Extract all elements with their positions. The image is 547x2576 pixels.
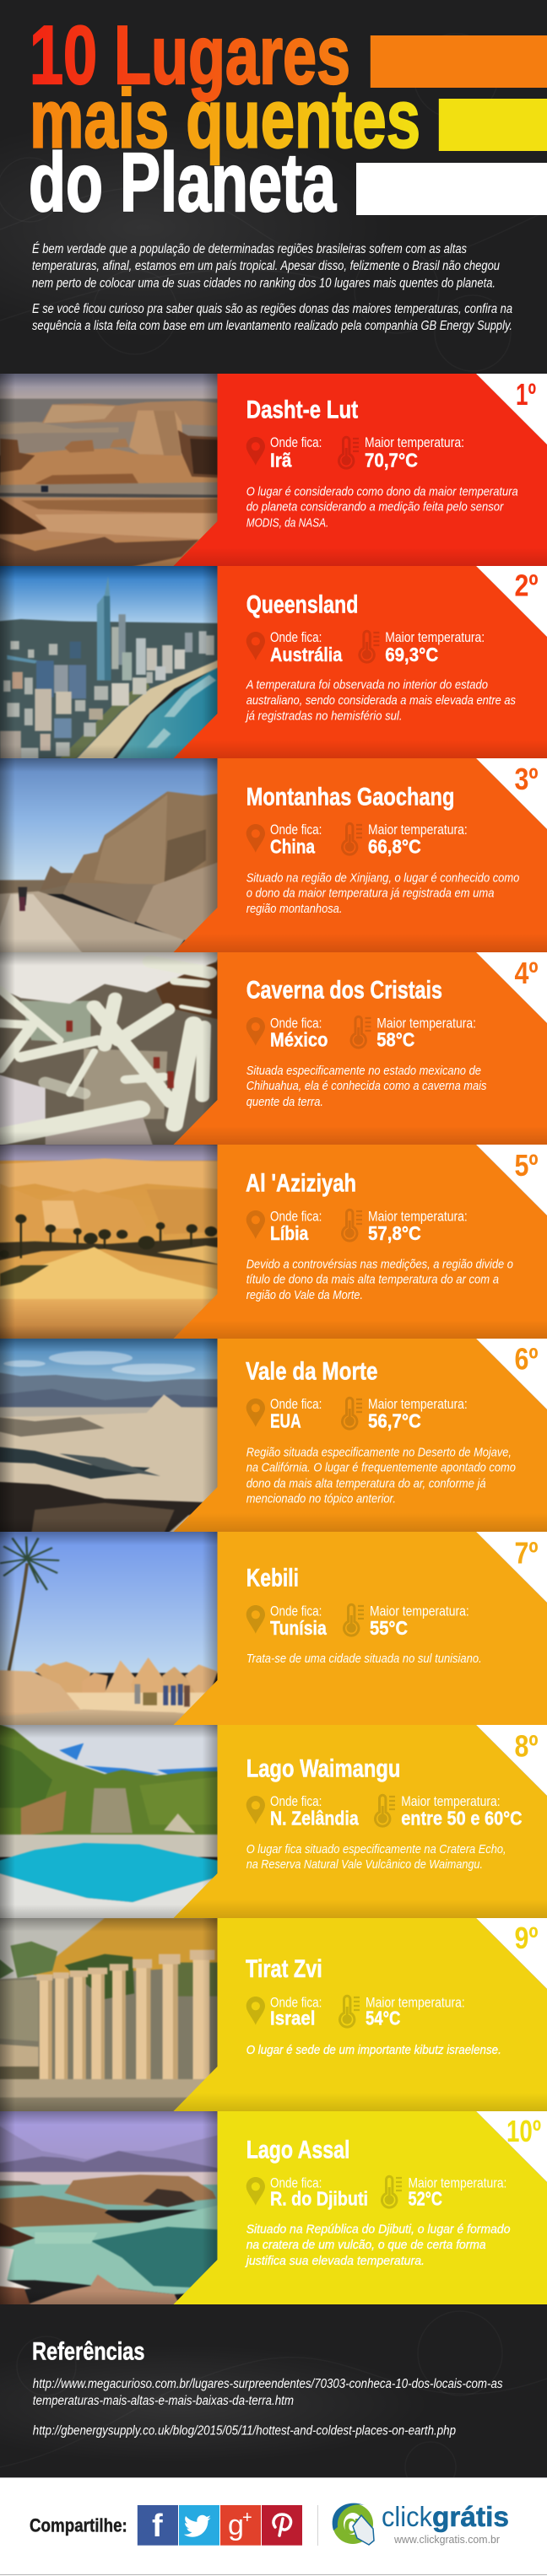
icon: google plus: +	[242, 2509, 252, 2527]
rank corner: 2º	[515, 569, 539, 603]
max temperature: 69,3°C	[385, 644, 438, 666]
description: na Califórnia. O lugar é frequentemente apontado como	[246, 1461, 516, 1474]
max temperature	[360, 630, 485, 666]
location: Tunísia	[270, 1617, 327, 1639]
rank corner: 5º	[515, 1148, 539, 1183]
description	[246, 1064, 486, 1109]
max temperature: Maior temperatura:	[401, 1794, 501, 1809]
location: Onde fica:	[270, 1794, 322, 1809]
rank corner	[476, 1145, 547, 1215]
photo: Death Valley	[0, 1337, 223, 1533]
logo emblem: g	[344, 2509, 361, 2541]
description	[246, 486, 518, 530]
max temperature: 56,7°C	[368, 1410, 421, 1432]
description: na Reserva Natural Vale Vulcânico de Waimangu.	[246, 1858, 483, 1872]
description: quente da terra.	[246, 1096, 323, 1109]
photo: sand dunes	[0, 1145, 223, 1341]
location: Onde fica:	[270, 630, 322, 645]
location: EUA	[270, 1410, 301, 1432]
card background	[174, 566, 547, 758]
max temperature: 52°C	[409, 2187, 442, 2209]
icon: twitter	[179, 2505, 219, 2546]
description: região montanhosa.	[246, 903, 342, 916]
description: Situado na região de Xinjiang, o lugar é conhecido como	[246, 871, 519, 885]
reference links: http://gbenergysupply.co.uk/blog/2015/05/11/hottest-and-coldest-places-on-earth.php	[33, 2424, 456, 2439]
panel: 10º Lago Assal	[0, 2110, 547, 2309]
description: MODIS, da NASA.	[246, 516, 328, 530]
place name: Lago Waimangu	[246, 1755, 400, 1783]
description: O lugar é considerado como dono da maior temperatura	[246, 486, 518, 499]
location	[246, 1016, 328, 1051]
description: título de dono da mais alta temperatura do ar com a	[246, 1273, 499, 1286]
references heading: Referências	[32, 2337, 145, 2365]
max temperature	[344, 1603, 469, 1639]
description: dono da mais alta temperatura do ar, conforme já	[246, 1477, 486, 1490]
card background	[174, 1725, 547, 1918]
intro text: É bem verdade que a população de determinadas regiões brasileiras sofrem com as altas	[32, 242, 467, 256]
card background	[174, 758, 547, 952]
location: Onde fica:	[270, 822, 322, 838]
rank corner: 8º	[515, 1729, 539, 1764]
max temperature: Maior temperatura:	[385, 630, 485, 645]
description: Devido a controvérsias nas medições, a região divide o	[246, 1258, 513, 1271]
max temperature: 57,8°C	[368, 1222, 421, 1244]
max temperature: 55°C	[370, 1617, 408, 1639]
location: Onde fica:	[270, 1209, 322, 1224]
icon: facebook: f	[152, 2509, 163, 2544]
location: Onde fica:	[270, 1603, 322, 1619]
intro text	[32, 242, 512, 333]
icon: google plus: g	[228, 2509, 244, 2541]
location: Onde fica:	[270, 2175, 322, 2191]
photo: Queensland coast	[0, 563, 223, 761]
rank corner	[476, 758, 547, 829]
card background	[174, 1145, 547, 1339]
location	[246, 630, 343, 666]
photo: Kebili palm and domes	[0, 1529, 223, 1727]
max temperature: 54°C	[366, 2007, 400, 2029]
location	[246, 1995, 322, 2029]
title: mais quentes	[30, 73, 420, 165]
description: australiano, sendo considerada a mais elevada entre as	[246, 694, 516, 708]
location: Austrália	[270, 644, 343, 666]
title	[29, 8, 420, 229]
card background	[174, 1532, 547, 1725]
description: Chihuahua, ela é conhecida como a caverna mais	[246, 1080, 486, 1093]
description: Trata-se de uma cidade situada no sul tunisiano.	[246, 1652, 482, 1666]
max temperature: entre 50 e 60°C	[401, 1808, 523, 1830]
description: O lugar fica situado especificamente na Cratera Echo,	[246, 1843, 506, 1857]
description: na cratera de um vulcão, o que de certa forma	[246, 2239, 486, 2252]
photo: Dasht-e Lut desert	[0, 371, 223, 568]
logo wordmark: grátis	[432, 2501, 509, 2532]
logo: clickgrátis	[333, 2501, 509, 2546]
description: justifica sua elevada temperatura.	[245, 2255, 425, 2268]
rank corner: 4º	[515, 956, 539, 990]
panel: 3º Montanhas Gaochang	[0, 757, 547, 955]
card background	[174, 1339, 547, 1532]
description: região do Vale da Morte.	[246, 1289, 363, 1302]
rank corner	[476, 1532, 547, 1603]
description: já registradas no hemisfério sul.	[245, 710, 402, 724]
panel: 5º Al 'Aziziyah	[0, 1145, 547, 1341]
place name: Lago Assal	[246, 2136, 349, 2164]
max temperature: 66,8°C	[368, 836, 421, 858]
description	[246, 871, 519, 916]
share label: Compartilhe:	[30, 2515, 127, 2536]
location	[246, 1794, 359, 1830]
logo emblem	[333, 2503, 374, 2545]
location	[246, 435, 322, 471]
location	[246, 2175, 368, 2209]
place name: Al 'Aziziyah	[246, 1170, 356, 1198]
background: dark header	[0, 0, 547, 374]
panel: 2º Queensland	[0, 563, 547, 761]
description	[246, 1446, 516, 1506]
description: A temperatura foi observada no interior do estado	[246, 679, 488, 693]
place name: Vale da Morte	[246, 1358, 378, 1386]
place name: Kebili	[246, 1565, 299, 1592]
icon: facebook	[138, 2505, 178, 2546]
location	[246, 822, 322, 858]
icon: google plus	[220, 2505, 261, 2546]
photo: roman columns	[0, 1916, 223, 2113]
place name: Dasht-e Lut	[246, 396, 358, 424]
max temperature	[343, 1209, 468, 1244]
location: Onde fica:	[270, 1995, 322, 2010]
description	[246, 1843, 506, 1872]
panel: 1º Dasht-e Lut	[0, 371, 547, 568]
max temperature	[339, 435, 464, 471]
rank corner	[476, 566, 547, 637]
description	[245, 2223, 510, 2268]
logo wordmark: click	[382, 2501, 432, 2532]
location: N. Zelândia	[270, 1808, 359, 1830]
location: China	[270, 836, 315, 858]
photo: Lake Assal	[0, 2110, 223, 2309]
icon: pinterest	[262, 2505, 302, 2546]
location: R. do Djibuti	[270, 2187, 368, 2209]
location	[246, 1603, 327, 1639]
card background	[174, 374, 547, 566]
reference links: temperaturas-mais-altas-e-mais-baixas-da-terra.htm	[33, 2394, 294, 2408]
rank corner: 3º	[515, 762, 539, 796]
description: Situado na República do Djibuti, o lugar é formado	[246, 2223, 510, 2237]
rank corner	[476, 374, 547, 445]
place name: Caverna dos Cristais	[246, 976, 442, 1004]
panel: 8º Lago Waimangu	[0, 1723, 547, 1921]
max temperature: Maior temperatura:	[366, 1995, 465, 2010]
rank corner	[476, 1725, 547, 1796]
title color bars	[356, 35, 547, 215]
photo: turquoise crater lake	[0, 1723, 223, 1921]
location: Onde fica:	[270, 1016, 322, 1031]
panel: references	[0, 2304, 547, 2492]
panel: 6º Vale da Morte	[0, 1337, 547, 1533]
panel: 9º Tirat Zvi	[0, 1916, 547, 2113]
description: o dono da maior temperatura já registrada em uma	[246, 887, 495, 900]
description	[245, 679, 516, 724]
max temperature	[343, 822, 468, 858]
card background	[174, 2111, 547, 2304]
place name: Queensland	[246, 591, 358, 619]
location: Israel	[270, 2007, 316, 2029]
footer	[0, 2477, 547, 2576]
max temperature: Maior temperatura:	[370, 1603, 469, 1619]
description: do planeta considerando a medição feita pelo sensor	[246, 501, 504, 515]
description	[246, 1258, 513, 1302]
max temperature: Maior temperatura:	[365, 435, 464, 450]
description: O lugar é sede de um importante kibutz israelense.	[246, 2044, 501, 2057]
rank corner	[476, 1918, 547, 1989]
description: Região situada especificamente no Deserto de Mojave,	[246, 1446, 512, 1459]
rank corner: 6º	[515, 1341, 539, 1376]
max temperature: Maior temperatura:	[368, 1209, 468, 1224]
location: Onde fica:	[270, 435, 322, 450]
location: Líbia	[270, 1222, 308, 1244]
rank corner	[476, 1339, 547, 1409]
place name: Tirat Zvi	[246, 1955, 322, 1983]
max temperature	[343, 1397, 468, 1432]
max temperature	[382, 2175, 506, 2209]
reference links	[33, 2377, 503, 2439]
description: Situada especificamente no estado mexicano de	[246, 1064, 481, 1078]
panel: 7º Kebili	[0, 1529, 547, 1727]
logo wordmark: www.clickgratis.com.br	[393, 2533, 501, 2546]
max temperature: Maior temperatura:	[368, 822, 468, 838]
location	[246, 1397, 322, 1432]
max temperature: Maior temperatura:	[368, 1397, 468, 1412]
card background	[174, 952, 547, 1145]
place name: Montanhas Gaochang	[246, 783, 454, 811]
max temperature: Maior temperatura:	[409, 2175, 506, 2191]
card background	[174, 1918, 547, 2111]
max temperature	[339, 1995, 465, 2029]
photo: crystal cave	[0, 951, 223, 1147]
max temperature	[351, 1016, 476, 1051]
location: Irã	[270, 449, 292, 471]
location: Onde fica:	[270, 1397, 322, 1412]
max temperature	[375, 1794, 523, 1830]
description: mencionado no tópico anterior.	[246, 1492, 396, 1506]
rank corner: 7º	[515, 1535, 539, 1570]
photo: Gaochang ruins	[0, 757, 223, 955]
title: do Planeta	[29, 136, 337, 229]
logo wordmark	[382, 2501, 509, 2546]
rank corner	[476, 952, 547, 1023]
rank corner: 1º	[516, 377, 536, 412]
rank corner: 9º	[515, 1921, 539, 1955]
max temperature: Maior temperatura:	[376, 1016, 476, 1031]
title: 10 Lugares	[30, 8, 350, 101]
panel: 4º Caverna dos Cristais	[0, 951, 547, 1147]
location	[246, 1209, 322, 1244]
max temperature: 70,7°C	[365, 449, 418, 471]
location: México	[270, 1029, 328, 1051]
rank corner	[476, 2111, 547, 2182]
max temperature: 58°C	[376, 1029, 414, 1051]
